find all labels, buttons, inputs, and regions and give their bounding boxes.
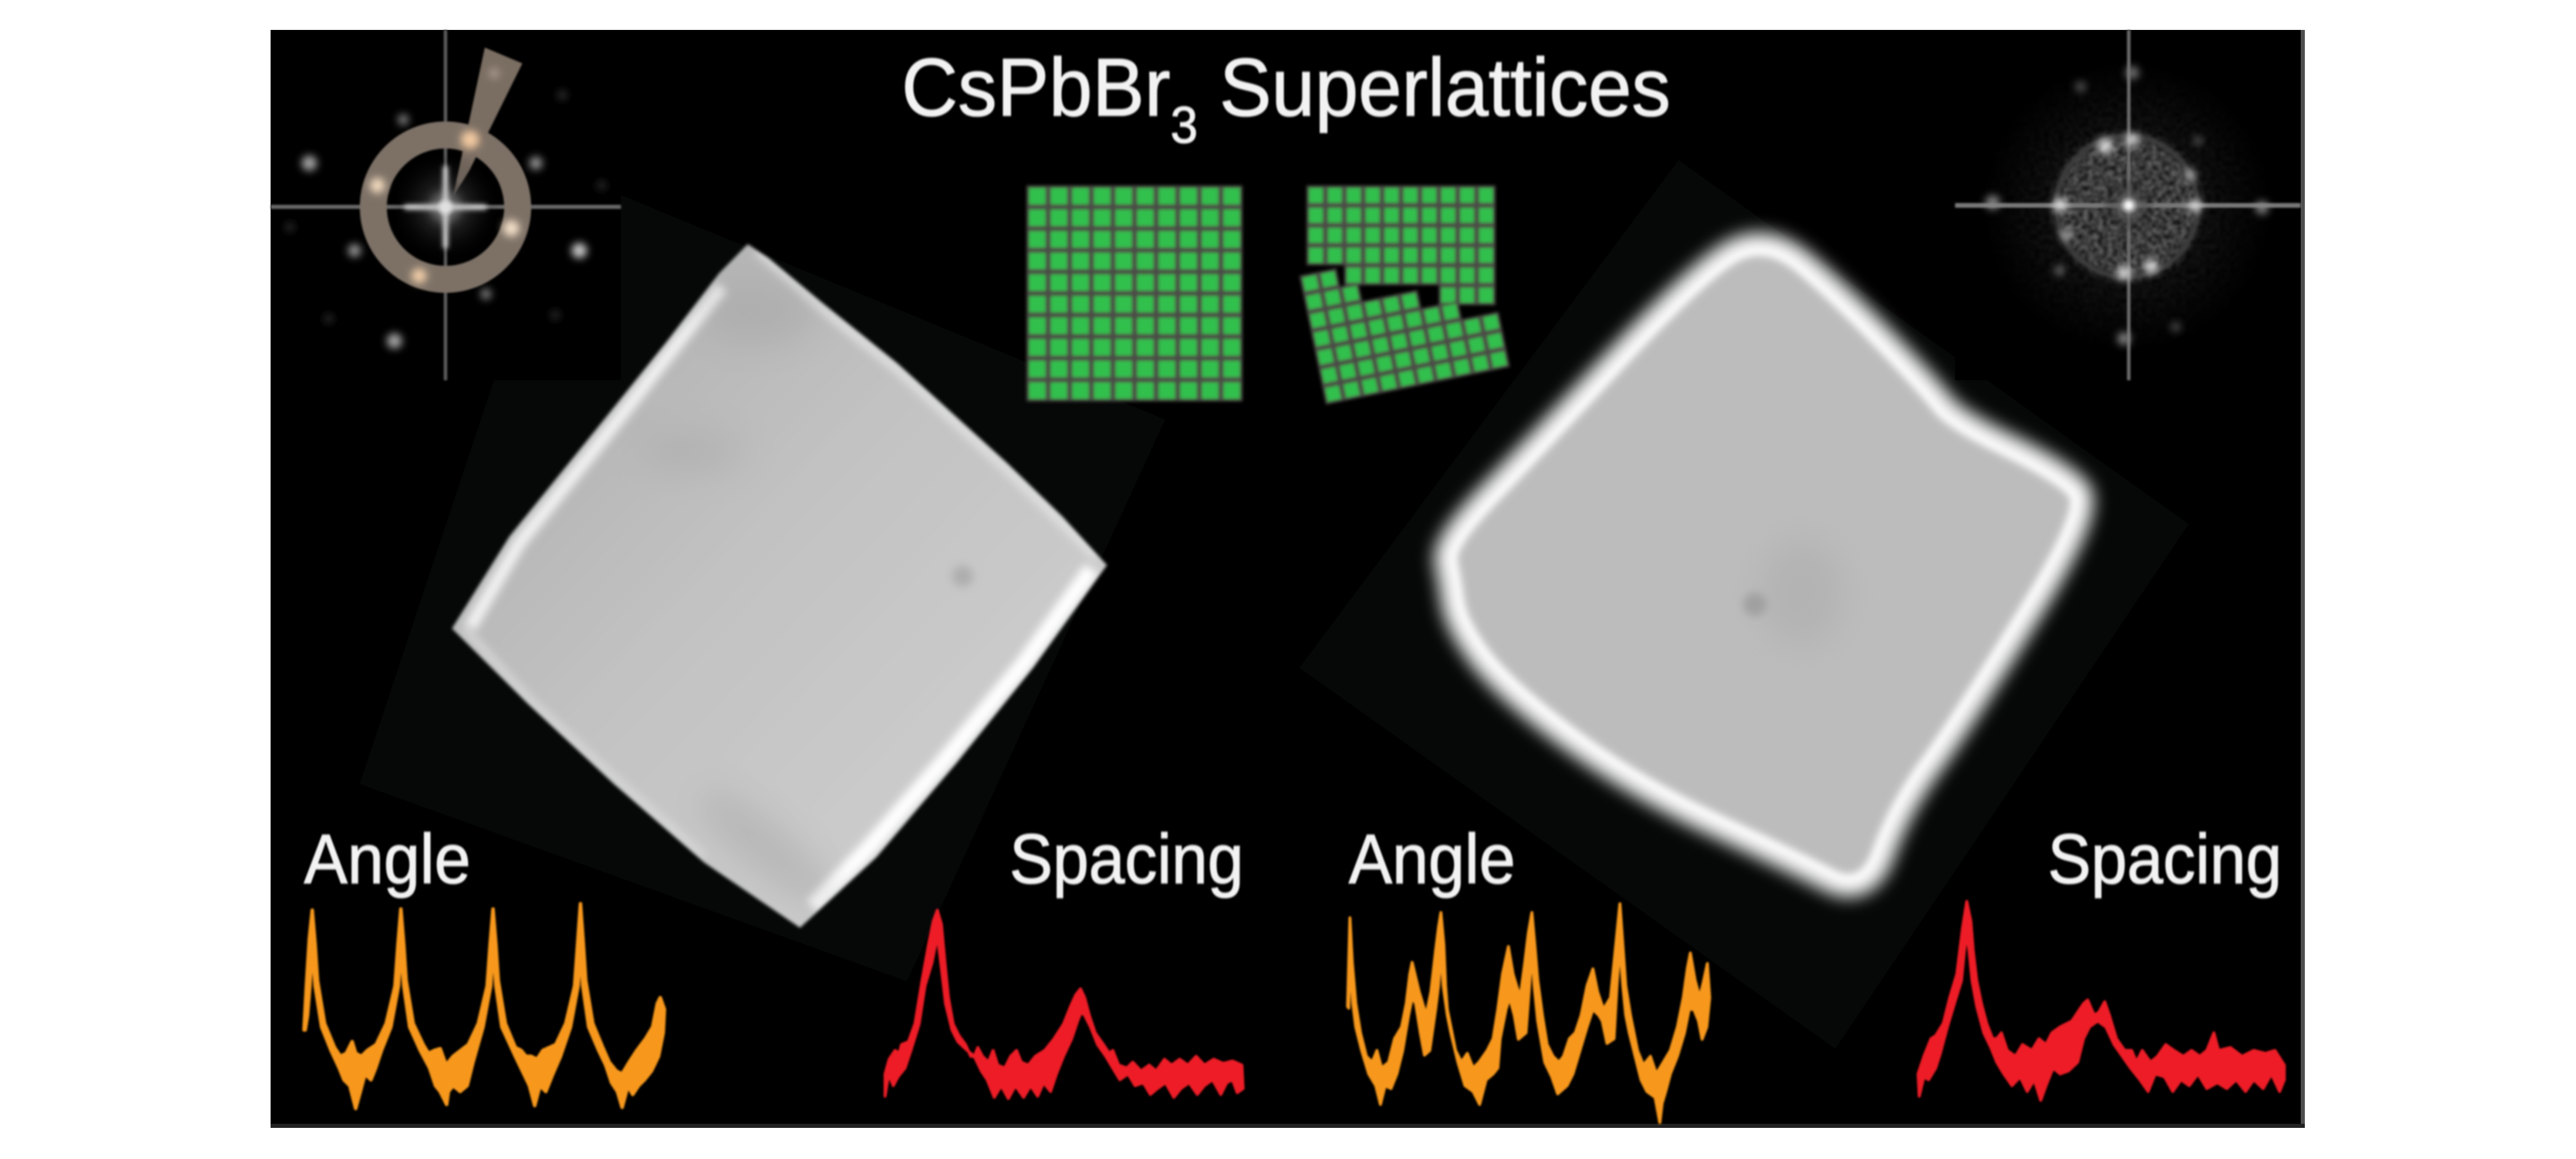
panel: right crystal image	[1299, 160, 2189, 1049]
wedge overlay	[453, 48, 522, 197]
crystal: distorted superlattice with bright rim	[1452, 250, 2076, 880]
label: right Spacing: Spacing	[2048, 820, 2282, 898]
panel: black background	[271, 30, 2305, 1128]
diffraction spots	[1986, 66, 2268, 345]
crystal: uniform superlattice	[446, 235, 1115, 933]
diagram: ordered nanocube lattice	[1027, 185, 1243, 401]
diagram: disordered nanocube lattice	[1299, 185, 1510, 404]
central beam glow	[2102, 178, 2156, 232]
title: 3	[1170, 96, 1198, 154]
chart: right angle profile	[1348, 904, 1710, 1123]
label: right Angle: Angle	[1349, 820, 1515, 898]
label: left Angle: Angle	[304, 820, 471, 898]
panel: left crystal image	[448, 242, 1109, 931]
title: Superlattices	[1198, 41, 1670, 133]
chart: left angle profile	[304, 904, 664, 1109]
title: CsPbBr	[902, 41, 1170, 133]
ring overlay	[373, 135, 518, 279]
diffraction spots	[285, 68, 606, 349]
chart: right spacing profile	[1918, 901, 2284, 1100]
chart: left spacing profile	[885, 910, 1243, 1099]
inset: right FFT pattern	[1955, 30, 2301, 380]
inset: left FFT pattern with ring and wedge selection	[271, 30, 621, 380]
central beam glow	[390, 151, 501, 263]
label: left Spacing: Spacing	[1010, 820, 1244, 898]
